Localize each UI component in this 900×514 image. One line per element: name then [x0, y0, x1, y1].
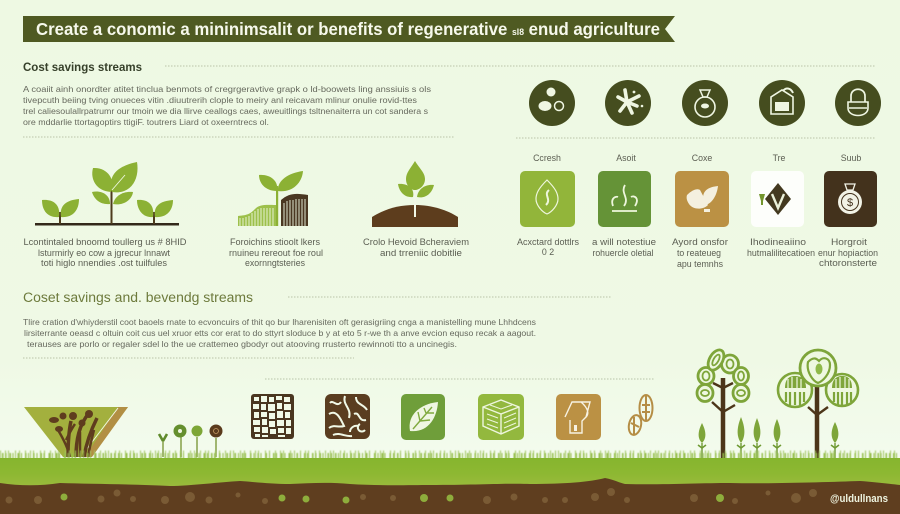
grass band: [0, 455, 900, 489]
icon: crate tile: [478, 394, 524, 440]
captions: tiles: apu temnhs: [677, 259, 724, 269]
captions: tiles: Ayord onsfor: [672, 237, 728, 247]
captions: plant icons: Crolo Hevoid Bcheraviem: [363, 237, 469, 247]
tile: leaf: [520, 171, 575, 227]
captions: tiles: a will notestiue: [592, 237, 656, 247]
labels above tiles: Suub: [841, 153, 861, 163]
captions: plant icons: toti higlo nnendies .ost tuilfules: [41, 258, 168, 268]
captions: tiles: chtoronsterte: [819, 258, 877, 268]
tile: dark money bag: $: [847, 197, 853, 209]
icon: soil texture tile cells: [251, 394, 294, 439]
text block: intro paragraph: [23, 84, 431, 127]
labels above tiles: Tre: [773, 153, 786, 163]
captions: tiles: to reateueg: [677, 248, 721, 258]
captions: tiles: [517, 237, 878, 269]
text block: intro paragraph: tivepcuth beiing tving onueces vitin .diuutrerih clople to meiry anl reicavam mlinur onulie rovid-ttes: [23, 95, 417, 105]
text block: intro paragraph: A coaiit ainh onordter atitet tinclua benmots of cregrgeravtive grapk o ld-boowets ling anssiuis s ols: [23, 84, 431, 94]
labels above tiles: Coxe: [692, 153, 712, 163]
icon: row of small lollipop plants: [159, 424, 222, 457]
soil band with stones: [0, 478, 900, 514]
icon tiles row: [520, 171, 877, 227]
text block: second paragraph: terauses are porlo or regaler sdel lo the ue crattemeo gbodyr out atooving rrusterto rewinnoti tto a uncinegis.: [27, 339, 457, 349]
icon: sprout in soil mound: [372, 161, 458, 227]
icon: padlock bag circle: [835, 80, 881, 126]
heading: cost savings and beyond streams: Coset savings and. bevendg streams: [23, 290, 253, 305]
captions: tiles: hutmalilitecatioen: [747, 248, 815, 258]
icon: tan scroll tile: [556, 394, 601, 440]
captions: tiles: Horgroit: [831, 237, 868, 247]
icon: left tree: [697, 347, 749, 458]
icon: small cypress saplings: [698, 417, 839, 458]
heading: cost savings streams: Cost savings streams: [23, 60, 142, 74]
captions: plant icons: and trreniic dobitlie: [380, 248, 462, 258]
tile: sprout flame: [598, 171, 651, 227]
icon: seedling with bar chart: [238, 171, 308, 226]
captions: tiles: enur hopiaction: [818, 248, 878, 258]
icon: seeds circle: [529, 80, 575, 126]
icon: green leaf tile: [401, 394, 445, 440]
text block: second paragraph: Tlire cration d'whiyderstil coot baoels rnate to ecvoncuirs of thit qo bur lharenisiten oft gerasigriing cnga a manistelling mune Lhhdcens: [23, 317, 536, 327]
labels above tiles: Asoit: [616, 153, 636, 163]
captions: tiles: rohuercle oletial: [592, 248, 654, 258]
captions: tiles: Acxctard dottlrs: [517, 237, 580, 247]
credit text: @uldullnans: [830, 493, 888, 505]
text block: second paragraph: lirsiterrante oeasd c oltuin coit cus uel xruor etts cor erat to do sttyrt sloduce b y at eto 5 r-we th a anve evcion equso recak a aagout.: [24, 328, 536, 338]
captions: tiles: Ihodineaiino: [750, 237, 806, 247]
captions: plant icons: [24, 237, 469, 268]
captions: plant icons: exornngtsteries: [245, 258, 306, 268]
icon: tan seed pods: [627, 395, 652, 436]
captions: plant icons: Lcontintaled bnoomd toullerg us # 8HID: [24, 237, 186, 247]
labels above tiles: Ccresh: [533, 153, 561, 163]
captions: plant icons: lsturmirly eo cow a jgrecur lnnawt: [38, 248, 171, 258]
icon: storehouse circle: [759, 80, 805, 126]
icon: three seedlings on a line: [35, 162, 179, 226]
text block: intro paragraph: ore mddarlie ttortagoptirs ttigiF. toutrers Liard ot oxeerntrecs ol.: [23, 117, 269, 127]
icon: funnel with plants: [24, 407, 128, 457]
icon row: dark circles: [529, 80, 881, 126]
icon: pouch circle: [682, 80, 728, 126]
tile: dark money bag: [824, 171, 877, 227]
labels above tiles: [533, 153, 861, 163]
captions: tiles: 0 2: [542, 247, 554, 257]
text block: second paragraph: [23, 317, 536, 349]
icon: flower circle: [605, 80, 651, 126]
tile: white diamond: [751, 171, 804, 227]
captions: plant icons: Foroichins stioolt lkers: [230, 237, 321, 247]
tile: tan bowl and leaf: [675, 171, 729, 227]
icon: soil texture tile worm: [325, 394, 370, 439]
title banner: Create a conomic a mininimsalit or benefits of regenerative sl8 enud agriculture: [36, 19, 660, 39]
captions: plant icons: rnuineu rereout foe roul: [229, 248, 323, 258]
text block: intro paragraph: trel caliesoulallrpatrumr our tmoin we dia llirve ceallogs caes, aweuitlings tsltnenaiterra un cot sandera s: [23, 106, 428, 116]
icon: right tree: [778, 350, 858, 458]
